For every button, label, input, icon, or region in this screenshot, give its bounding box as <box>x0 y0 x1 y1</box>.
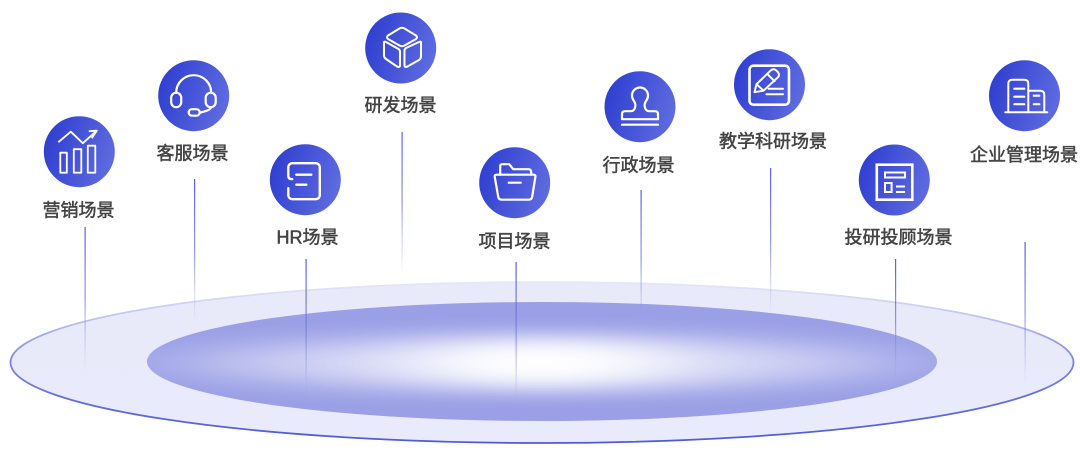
icon: pen on notepad <box>750 66 789 105</box>
icon: open folder <box>495 164 535 200</box>
connector line: 教学科研场景 <box>770 168 771 316</box>
connector line: 行政场景 <box>640 190 642 330</box>
icon: document tabs <box>288 163 320 199</box>
connector line: 项目场景 <box>516 262 517 407</box>
label: 行政场景 <box>602 156 674 176</box>
icon: office buildings <box>1005 80 1047 112</box>
label: 教学科研场景 <box>719 132 827 152</box>
platform: inner glowing ellipse <box>147 302 937 422</box>
label: 投研投顾场景 <box>844 228 952 248</box>
label: 客服场景 <box>156 144 228 164</box>
connector line: 企业管理场景 <box>1024 242 1026 387</box>
item: 客服场景 <box>156 60 229 164</box>
icon: headset <box>171 75 216 116</box>
icon: bar chart with trend arrow <box>58 131 97 173</box>
connector line: 营销场景 <box>84 227 86 372</box>
item: 投研投顾场景 <box>844 144 952 248</box>
icon: cube <box>384 28 421 67</box>
platform: outer ellipse <box>10 282 1074 443</box>
icon: stamp <box>622 88 658 125</box>
label: 研发场景 <box>364 96 436 116</box>
item: 研发场景 <box>364 12 436 116</box>
item: 企业管理场景 <box>970 60 1078 165</box>
label: HR场景 <box>276 228 338 248</box>
item: HR场景 <box>270 144 341 248</box>
item: 行政场景 <box>602 71 676 176</box>
connector line: 研发场景 <box>402 132 403 277</box>
item: 项目场景 <box>478 147 550 252</box>
connector line: 客服场景 <box>194 179 195 324</box>
icon: news report <box>877 165 912 200</box>
connector line: 投研投顾场景 <box>895 259 896 387</box>
label: 企业管理场景 <box>970 145 1078 165</box>
item: 营销场景 <box>42 116 115 220</box>
label: 营销场景 <box>42 200 114 220</box>
connector line: HR场景 <box>306 259 307 404</box>
item: 教学科研场景 <box>719 49 827 152</box>
label: 项目场景 <box>478 232 550 252</box>
